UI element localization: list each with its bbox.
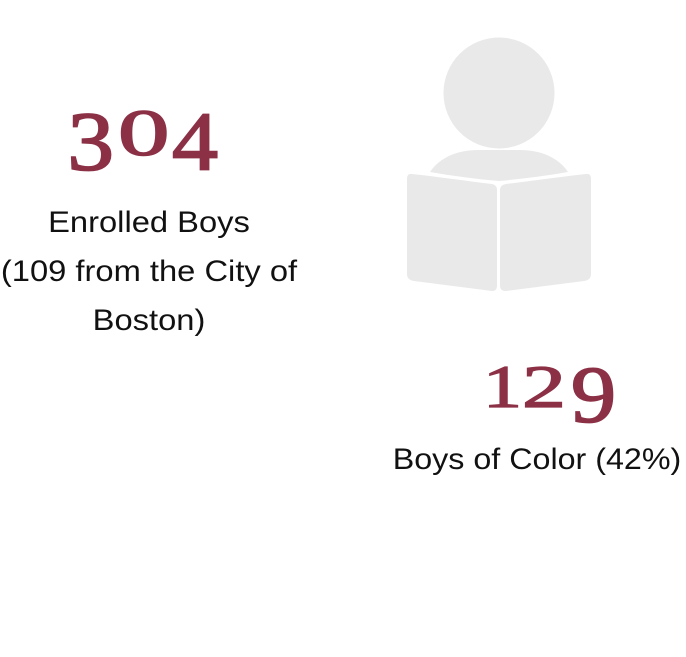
text: enrolled boys: Boston) (93, 304, 205, 337)
number: 129: 9 (571, 351, 616, 439)
number: 129 (483, 351, 616, 439)
number: 129: 2 (522, 354, 566, 421)
number: 129: 1 (483, 354, 522, 421)
text: enrolled boys: (109 from the City of (1, 255, 297, 288)
number: 304: 4 (172, 96, 218, 189)
text: enrolled boys: Enrolled Boys (48, 206, 250, 239)
icon: person reading a book (407, 38, 591, 291)
number: 304 (68, 96, 218, 189)
text: boys of color: Boys of Color (42%) (393, 443, 681, 476)
number: 304: 3 (68, 96, 114, 188)
text: enrolled boys (1, 206, 298, 337)
number: 304: 0 (118, 96, 169, 169)
